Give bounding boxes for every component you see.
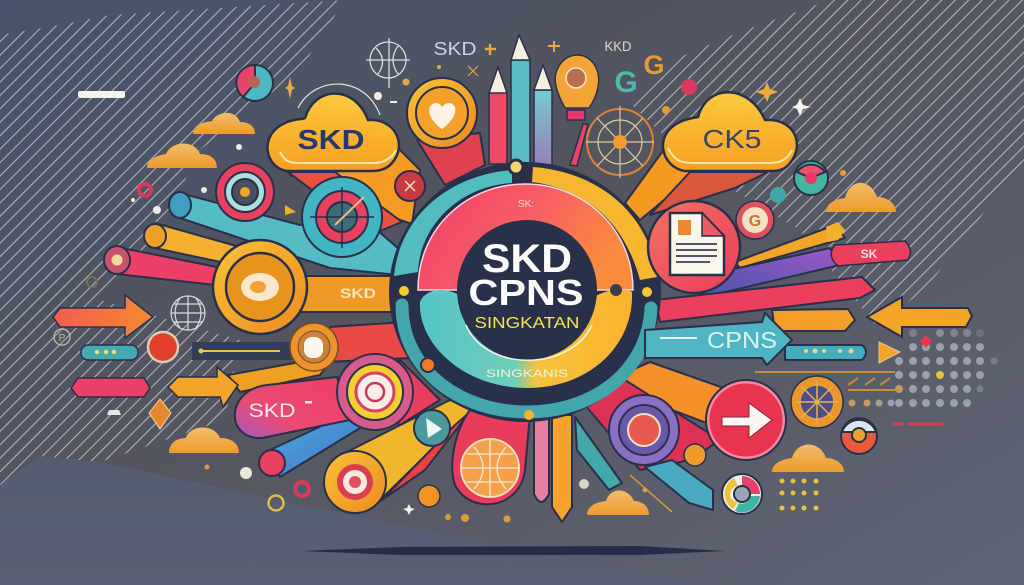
- arrow: orange center left: [168, 367, 238, 407]
- icon: star orange: [756, 82, 778, 102]
- right rays behind hub: [534, 148, 875, 522]
- yellow ring bead: [268, 496, 284, 510]
- ray: orange bar below red: [772, 309, 855, 331]
- ray: orange cap: [144, 224, 166, 248]
- document fold: [702, 213, 724, 236]
- yellow dot grid: [780, 478, 818, 510]
- left rays behind hub: [104, 133, 530, 505]
- ray: orange under SKD cloud: [290, 143, 420, 224]
- ray: orange under CKS cloud: [625, 148, 700, 220]
- red dash: [893, 422, 944, 426]
- ray: teal: [180, 193, 408, 276]
- cloud rim: [668, 148, 792, 163]
- ray: orange to red cylinder: [625, 362, 735, 425]
- icon: red ring circle: [148, 332, 178, 362]
- ring label bottom: SINGKANIS: [486, 368, 568, 380]
- ray: red cap: [104, 246, 130, 274]
- small red ring: [139, 184, 151, 196]
- icon: small gauge: [841, 418, 877, 454]
- white bead: [240, 467, 252, 479]
- ray: red under heart badge: [417, 133, 485, 185]
- subtitle: SINGKATAN: SINGKATAN: [474, 315, 580, 332]
- ray: red under SKD cloud: [288, 172, 402, 235]
- icon: crosshair globe: [366, 38, 410, 88]
- blue bar cap: [259, 450, 285, 476]
- label: SKD top: SKD: [434, 39, 476, 59]
- arrow glyph: [722, 403, 772, 438]
- document lines: [676, 244, 717, 262]
- red pill: [71, 378, 150, 397]
- icon: orange letter badge: [290, 323, 338, 371]
- node left: [399, 286, 409, 296]
- icon: P circle: [54, 329, 70, 345]
- document sheet: [670, 213, 724, 275]
- stamp ring: [87, 277, 97, 287]
- ray: pink pencil: [534, 418, 549, 502]
- teal bar dots: [804, 348, 854, 354]
- orange bar head: [826, 222, 845, 242]
- ray: teal cap: [169, 192, 191, 218]
- icon: colour pie lower: [722, 474, 762, 514]
- icon: globe left: [171, 296, 205, 330]
- icon: arrow button: [706, 380, 786, 460]
- cloud lower left: [169, 428, 239, 453]
- icon: teal dot: [770, 187, 786, 203]
- white dash: [78, 91, 125, 98]
- title: CPNS: CPNS: [468, 272, 584, 313]
- icon: orange G: G: [643, 50, 665, 80]
- node right: [642, 287, 652, 297]
- cloud small 1: [193, 113, 255, 134]
- icon: pie right: [794, 161, 828, 195]
- icon: pie top left: [236, 65, 273, 101]
- node orange: [421, 358, 435, 372]
- ray: SKD orange bar: [290, 276, 398, 312]
- icon: large orange badge: [213, 240, 307, 334]
- arrow: CPNS: [645, 313, 792, 365]
- cap dot on red ray: [112, 254, 122, 266]
- pencil: teal tall: [511, 35, 530, 165]
- cloud rim: [280, 150, 396, 163]
- icon: G badge: [736, 201, 774, 239]
- ray: red stripes under CKS cloud: [650, 172, 768, 215]
- red diamond: [920, 335, 932, 348]
- CPNS dash: [660, 337, 697, 339]
- SK red bar head: [831, 241, 910, 266]
- icon: heart badge: [407, 78, 477, 148]
- ray: orange: [150, 223, 240, 263]
- icon: globe badge: [461, 439, 519, 497]
- ground shadow: [300, 546, 725, 555]
- pink upper ring: [418, 184, 633, 290]
- icon: plus right: [548, 41, 560, 52]
- node top: [509, 160, 523, 174]
- ray: teal bar: [785, 345, 866, 360]
- icon: teal G: G: [614, 66, 638, 99]
- outer arc yellow: [532, 167, 657, 280]
- icon: small red badge: [395, 171, 425, 201]
- ray: red globe bar: [452, 410, 530, 504]
- cloud small 2: [147, 144, 217, 168]
- ray: orange bar: [735, 225, 845, 268]
- ray: long red bar: [655, 277, 875, 322]
- label: KKD top: KKD: [604, 38, 632, 54]
- ray: yellow bar: [335, 400, 472, 505]
- ray: dark slider bar: [192, 342, 292, 360]
- document thumbnail: [678, 220, 691, 235]
- icon: small car: [107, 410, 121, 415]
- pencil: teal purple: [534, 65, 552, 165]
- pencil tip: [489, 67, 507, 93]
- outer arc teal: [394, 170, 512, 276]
- orange ball lower: [418, 485, 440, 507]
- ring label top: SK:: [518, 199, 534, 210]
- hub backing: [389, 162, 661, 422]
- icon: pink ring target: [216, 163, 274, 221]
- SKD cloud: [267, 93, 399, 171]
- ray: teal handle: [645, 460, 713, 510]
- icon: small red dot G: [681, 79, 697, 95]
- icon: purple badge: [609, 395, 679, 465]
- orange ball: [684, 444, 706, 466]
- cloud right: [826, 183, 896, 212]
- SKD pill label: SKD: [248, 401, 296, 422]
- dot grid: [848, 329, 998, 407]
- ray: purple bar: [700, 248, 840, 298]
- pill fleck: [305, 401, 312, 404]
- icon: orange dot small: [840, 170, 846, 176]
- ray: teal wedge: [575, 417, 622, 490]
- ray: blue bar: [270, 415, 365, 477]
- icon: orange dot: [662, 106, 670, 114]
- dots lower right: [579, 475, 672, 512]
- cloud lower center: [587, 490, 649, 515]
- ray: red: [117, 247, 222, 285]
- cloud lower right: [772, 444, 844, 472]
- lower orange flecks: [204, 464, 510, 522]
- icon: orange diamond: [149, 399, 171, 429]
- icon: play badge: [414, 410, 450, 446]
- cloud label: CK5: [702, 124, 762, 154]
- icon: yellow target: [337, 354, 413, 430]
- ray: orange pencil: [552, 415, 572, 522]
- outer lower teal band: [402, 305, 651, 412]
- lower teal yellow ring: [420, 290, 632, 388]
- central hub: [389, 160, 661, 422]
- icon: P circle: P: [59, 333, 66, 344]
- icon: document badge: [648, 201, 740, 293]
- icon: orange radar target: [586, 106, 654, 178]
- sparkle lower: [403, 504, 415, 515]
- SKD pink pill: [235, 377, 350, 438]
- icon: orange wheel: [791, 376, 843, 428]
- ray: pink behind target: [360, 360, 440, 425]
- CPNS label: CPNS: [707, 327, 777, 353]
- icon: teal crosshair target: [302, 177, 382, 257]
- pencil: pink: [489, 67, 507, 164]
- node dark: [610, 284, 622, 296]
- orange flecks: [285, 205, 296, 215]
- CKS cloud: [663, 92, 797, 171]
- red ring bead: [295, 482, 309, 496]
- icon: star white: [792, 98, 811, 116]
- arrow: left red: [53, 295, 153, 338]
- icon: lightbulb: [555, 55, 599, 166]
- icon: G badge: G: [749, 213, 761, 230]
- arrow: right orange left-pointing: [867, 297, 972, 337]
- orange node: [524, 410, 534, 420]
- title: SKD: SKD: [482, 237, 572, 281]
- label: SKD orange bar: SKD: [340, 285, 376, 301]
- pencil tip: [511, 35, 530, 60]
- white flecks: [131, 144, 242, 214]
- cloud label: SKD: [298, 124, 364, 155]
- ray: orange stripe: [382, 412, 470, 500]
- icon: sparkle: [285, 77, 295, 99]
- cloud arc: [298, 84, 380, 115]
- center disk: [457, 220, 597, 360]
- pencil tip: [534, 65, 552, 90]
- ray: red bar: [325, 322, 410, 362]
- icon: spark dots: [374, 65, 478, 103]
- ray: dark red wedge: [585, 380, 720, 470]
- ray: orange arrow tail: [228, 362, 330, 392]
- icon: orange bullseye: [324, 451, 386, 513]
- orange dashes: [755, 372, 900, 390]
- teal pill: [81, 345, 138, 360]
- disk white rim: [466, 325, 592, 360]
- icon: plus: [485, 44, 496, 55]
- triangle arrow: [879, 342, 900, 363]
- SK label: SK: [861, 247, 878, 261]
- slider line: [198, 348, 280, 354]
